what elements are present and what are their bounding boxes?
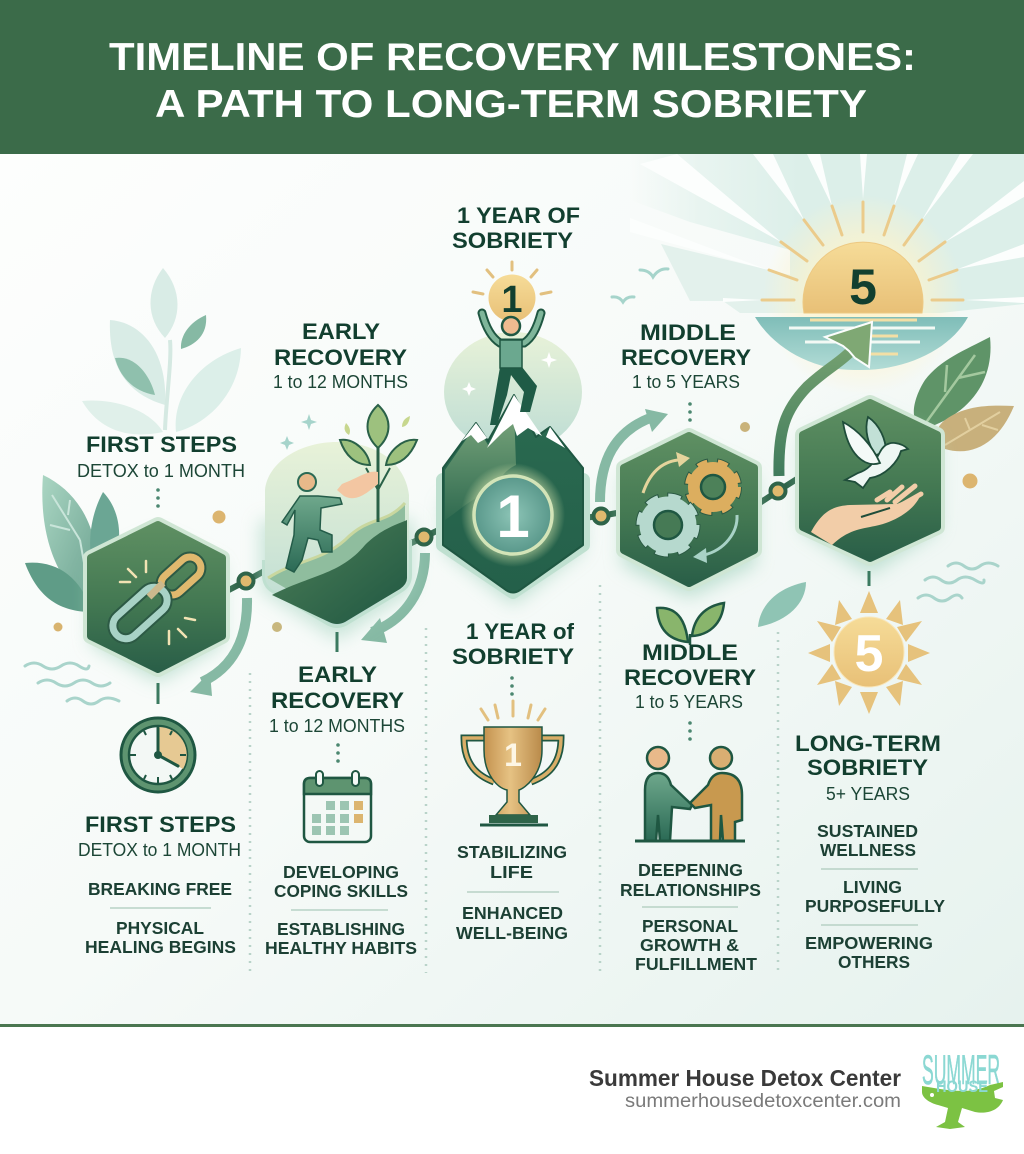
sun with number 5: [755, 202, 968, 370]
column: middle recovery: DEEPENING: [638, 860, 743, 880]
column: long-term sobriety: LONG-TERM: [795, 731, 941, 756]
icon: broken chain: [108, 552, 205, 644]
upper labels: RECOVERY: [621, 345, 751, 370]
stems and dotted connectors: [156, 402, 869, 973]
sun rays background: [630, 154, 1024, 395]
icon: number 1 badge: [461, 463, 565, 567]
footer brand text: Summer House Detox Center: [589, 1065, 901, 1091]
decorative plant top left: [82, 268, 241, 434]
icon: open hand: [811, 486, 921, 545]
upper labels: RECOVERY: [274, 345, 407, 370]
column: first steps: FIRST STEPS: [85, 812, 236, 837]
icon: trophy: [464, 701, 561, 825]
icon: climber: [282, 473, 342, 572]
column: one year: 1 YEAR of: [466, 619, 575, 644]
column: early recovery: COPING SKILLS: [274, 881, 408, 901]
header banner: [0, 0, 1024, 154]
column: long-term sobriety: [795, 591, 945, 972]
title: [109, 36, 916, 126]
column: middle recovery: 1 to 5 YEARS: [635, 692, 743, 712]
icon: sparkles: [280, 414, 317, 450]
logo: HOUSE: [936, 1077, 988, 1096]
column: one year: STABILIZING: [457, 842, 567, 862]
column: middle recovery: [620, 582, 806, 974]
column: middle recovery: GROWTH &: [640, 935, 739, 955]
upper labels: [77, 203, 751, 481]
title: TIMELINE OF RECOVERY MILESTONES:: [109, 36, 916, 79]
upper labels: EARLY: [302, 319, 380, 344]
column: middle recovery: PERSONAL: [642, 916, 738, 936]
column: early recovery: [265, 662, 417, 958]
upper labels: FIRST STEPS: [86, 432, 237, 457]
icon: sun badge: 5: [855, 625, 883, 683]
icon: dove: [843, 417, 908, 488]
curved arrows: [190, 409, 668, 696]
timeline connector: [225, 477, 800, 592]
logo: [922, 1046, 1003, 1129]
column: early recovery: EARLY: [298, 662, 377, 687]
column: long-term sobriety: EMPOWERING: [805, 933, 933, 953]
icon: number 1 badge: 1: [496, 483, 530, 550]
icon: sprout: [657, 603, 724, 645]
icon: clock: [121, 718, 195, 792]
column: long-term sobriety: SUSTAINED: [817, 821, 918, 841]
column: long-term sobriety: WELLNESS: [820, 840, 916, 860]
column: long-term sobriety: PURPOSEFULLY: [805, 896, 945, 916]
column: middle recovery: MIDDLE: [642, 640, 738, 665]
icon: calendar: [304, 771, 371, 842]
birds: [612, 269, 668, 302]
column: first steps: DETOX to 1 MONTH: [78, 840, 241, 860]
column: first steps: HEALING BEGINS: [85, 937, 236, 957]
footer brand text: summerhousedetoxcenter.com: [625, 1091, 901, 1112]
icon: mint gear: [640, 497, 696, 553]
icon: helping hand: [337, 472, 378, 498]
column: early recovery: HEALTHY HABITS: [265, 938, 417, 958]
decorative leaves left: [25, 475, 119, 612]
timeline nodes: [238, 484, 786, 588]
column: middle recovery: FULFILLMENT: [635, 954, 757, 974]
title: A PATH TO LONG-TERM SOBRIETY: [155, 83, 867, 126]
upper labels: 1 to 5 YEARS: [632, 372, 740, 392]
column: early recovery: DEVELOPING: [283, 862, 399, 882]
column: long-term sobriety: SOBRIETY: [807, 755, 928, 780]
big arrow to sun: [779, 322, 872, 476]
water: [755, 317, 968, 370]
column: long-term sobriety: 5+ YEARS: [826, 784, 910, 804]
column: first steps: PHYSICAL: [116, 918, 204, 938]
column: middle recovery: RECOVERY: [624, 665, 756, 690]
footer: [0, 1024, 1024, 1154]
milestone 5: dove hexagon: [802, 403, 938, 575]
column: long-term sobriety: OTHERS: [838, 952, 910, 972]
upper labels: 1 YEAR OF: [457, 203, 580, 228]
icon: figure with medal: 1: [501, 279, 523, 321]
milestone 3: mountain hexagon: [443, 262, 583, 605]
icon: figure with medal: [462, 262, 557, 425]
icon: sprout: [340, 405, 417, 522]
icon: sun badge: [808, 591, 930, 714]
column: early recovery: RECOVERY: [271, 688, 404, 713]
milestone 4: gears hexagon: [622, 436, 756, 598]
column: one year: ENHANCED: [462, 903, 563, 923]
upper labels: 1 to 12 MONTHS: [273, 372, 408, 392]
column: early recovery: ESTABLISHING: [277, 919, 405, 939]
column: early recovery: 1 to 12 MONTHS: [269, 716, 405, 736]
gold dots and waves: [25, 422, 998, 704]
icon: pale leaf: [758, 582, 806, 627]
milestone 2: climber hexagon: [260, 405, 417, 640]
icon: snow peaks: [462, 395, 565, 448]
upper labels: MIDDLE: [640, 320, 736, 345]
icon: trophy: 1: [504, 737, 522, 773]
column: long-term sobriety: LIVING: [843, 877, 902, 897]
decorative leaves right: [914, 337, 1014, 451]
column: one year: WELL-BEING: [456, 923, 568, 943]
icon: gold gear: [688, 462, 738, 512]
column: one year: SOBRIETY: [452, 644, 574, 669]
column: middle recovery: RELATIONSHIPS: [620, 880, 761, 900]
upper labels: DETOX to 1 MONTH: [77, 461, 245, 481]
icon: rotation arrows: [643, 452, 737, 563]
column: one year: [452, 619, 575, 943]
sun with number 5: 5: [849, 259, 877, 315]
column: one year: LIFE: [490, 862, 533, 882]
page background: [0, 154, 1024, 1026]
column: first steps: [78, 718, 241, 957]
milestone 1: chain hexagon: [91, 525, 222, 682]
icon: handshake: [635, 747, 745, 841]
column: first steps: BREAKING FREE: [88, 879, 232, 899]
footer brand text: [589, 1065, 901, 1112]
upper labels: SOBRIETY: [452, 228, 573, 253]
